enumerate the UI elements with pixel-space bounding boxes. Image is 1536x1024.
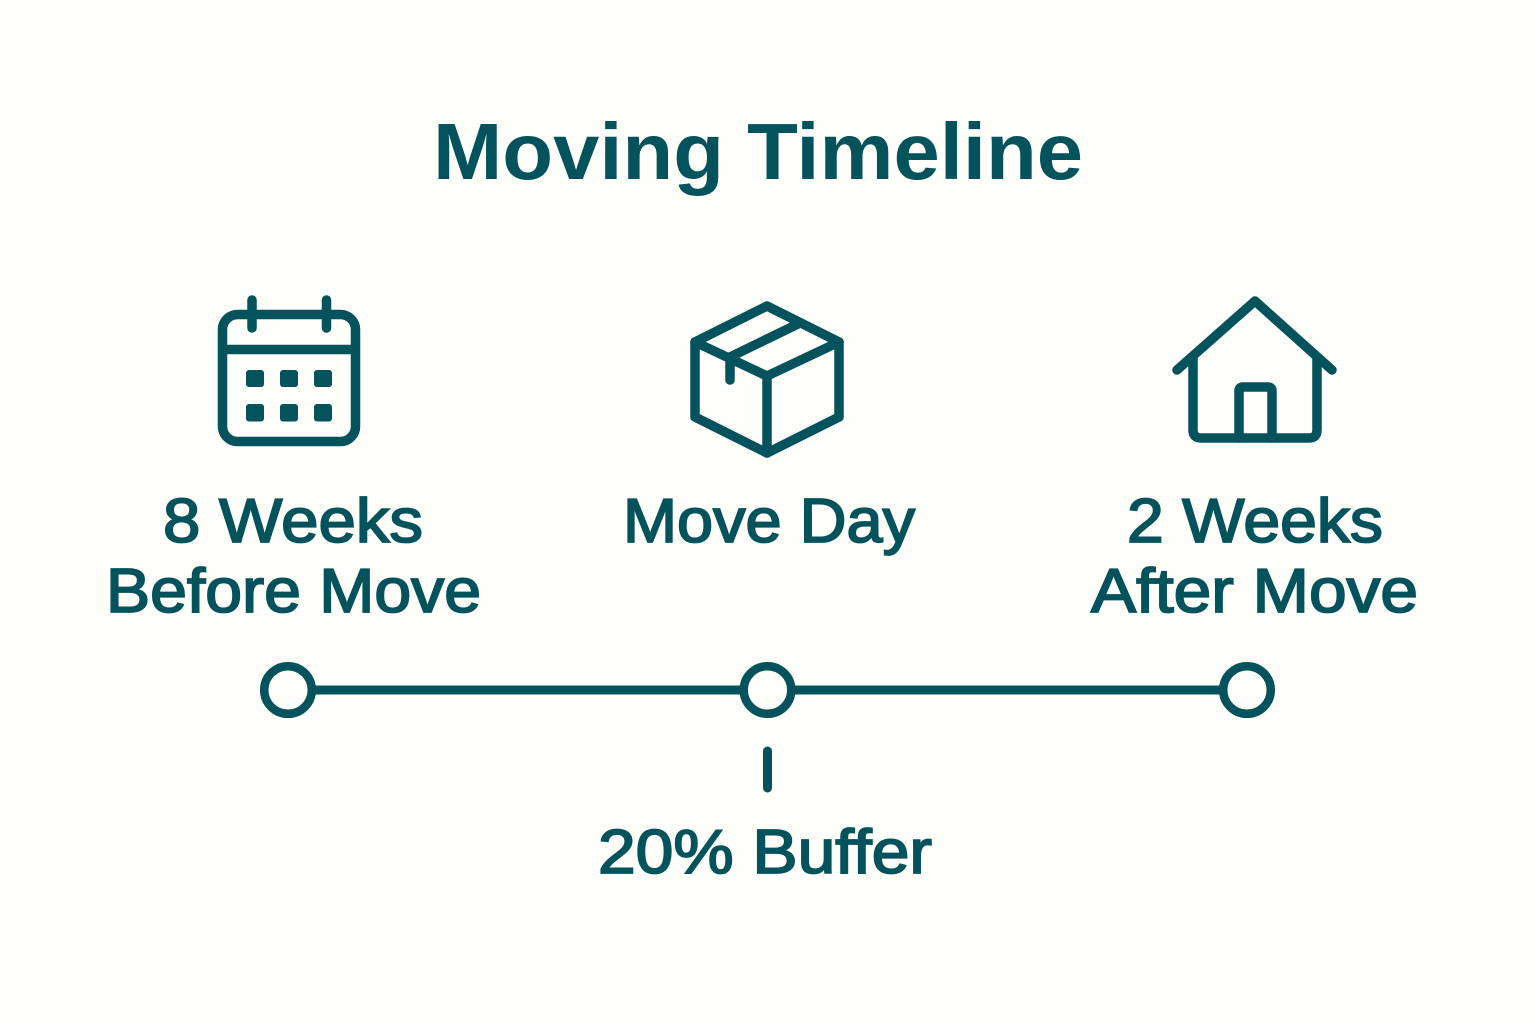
label: 8 weeks before move: 8 Weeks — [163, 487, 423, 556]
label: 2 weeks after move: After Move — [1091, 557, 1418, 626]
icon: house — [1177, 301, 1332, 438]
marker: move day — [744, 666, 791, 714]
label: 2 weeks after move — [1091, 487, 1418, 626]
label: 2 weeks after move: 2 Weeks — [1127, 487, 1383, 556]
label: 8 weeks before move: Before Move — [106, 557, 481, 626]
buffer tick — [763, 751, 772, 788]
label: move day: Move Day — [623, 487, 915, 556]
label: 8 weeks before move — [106, 487, 481, 626]
marker: end — [1223, 666, 1271, 714]
icon: calendar — [222, 300, 356, 442]
icon: moving box — [695, 306, 839, 453]
marker: start — [264, 666, 312, 714]
title: Moving Timeline — [433, 107, 1083, 196]
label: 20% buffer: 20% Buffer — [598, 818, 932, 887]
timeline — [264, 666, 1271, 714]
